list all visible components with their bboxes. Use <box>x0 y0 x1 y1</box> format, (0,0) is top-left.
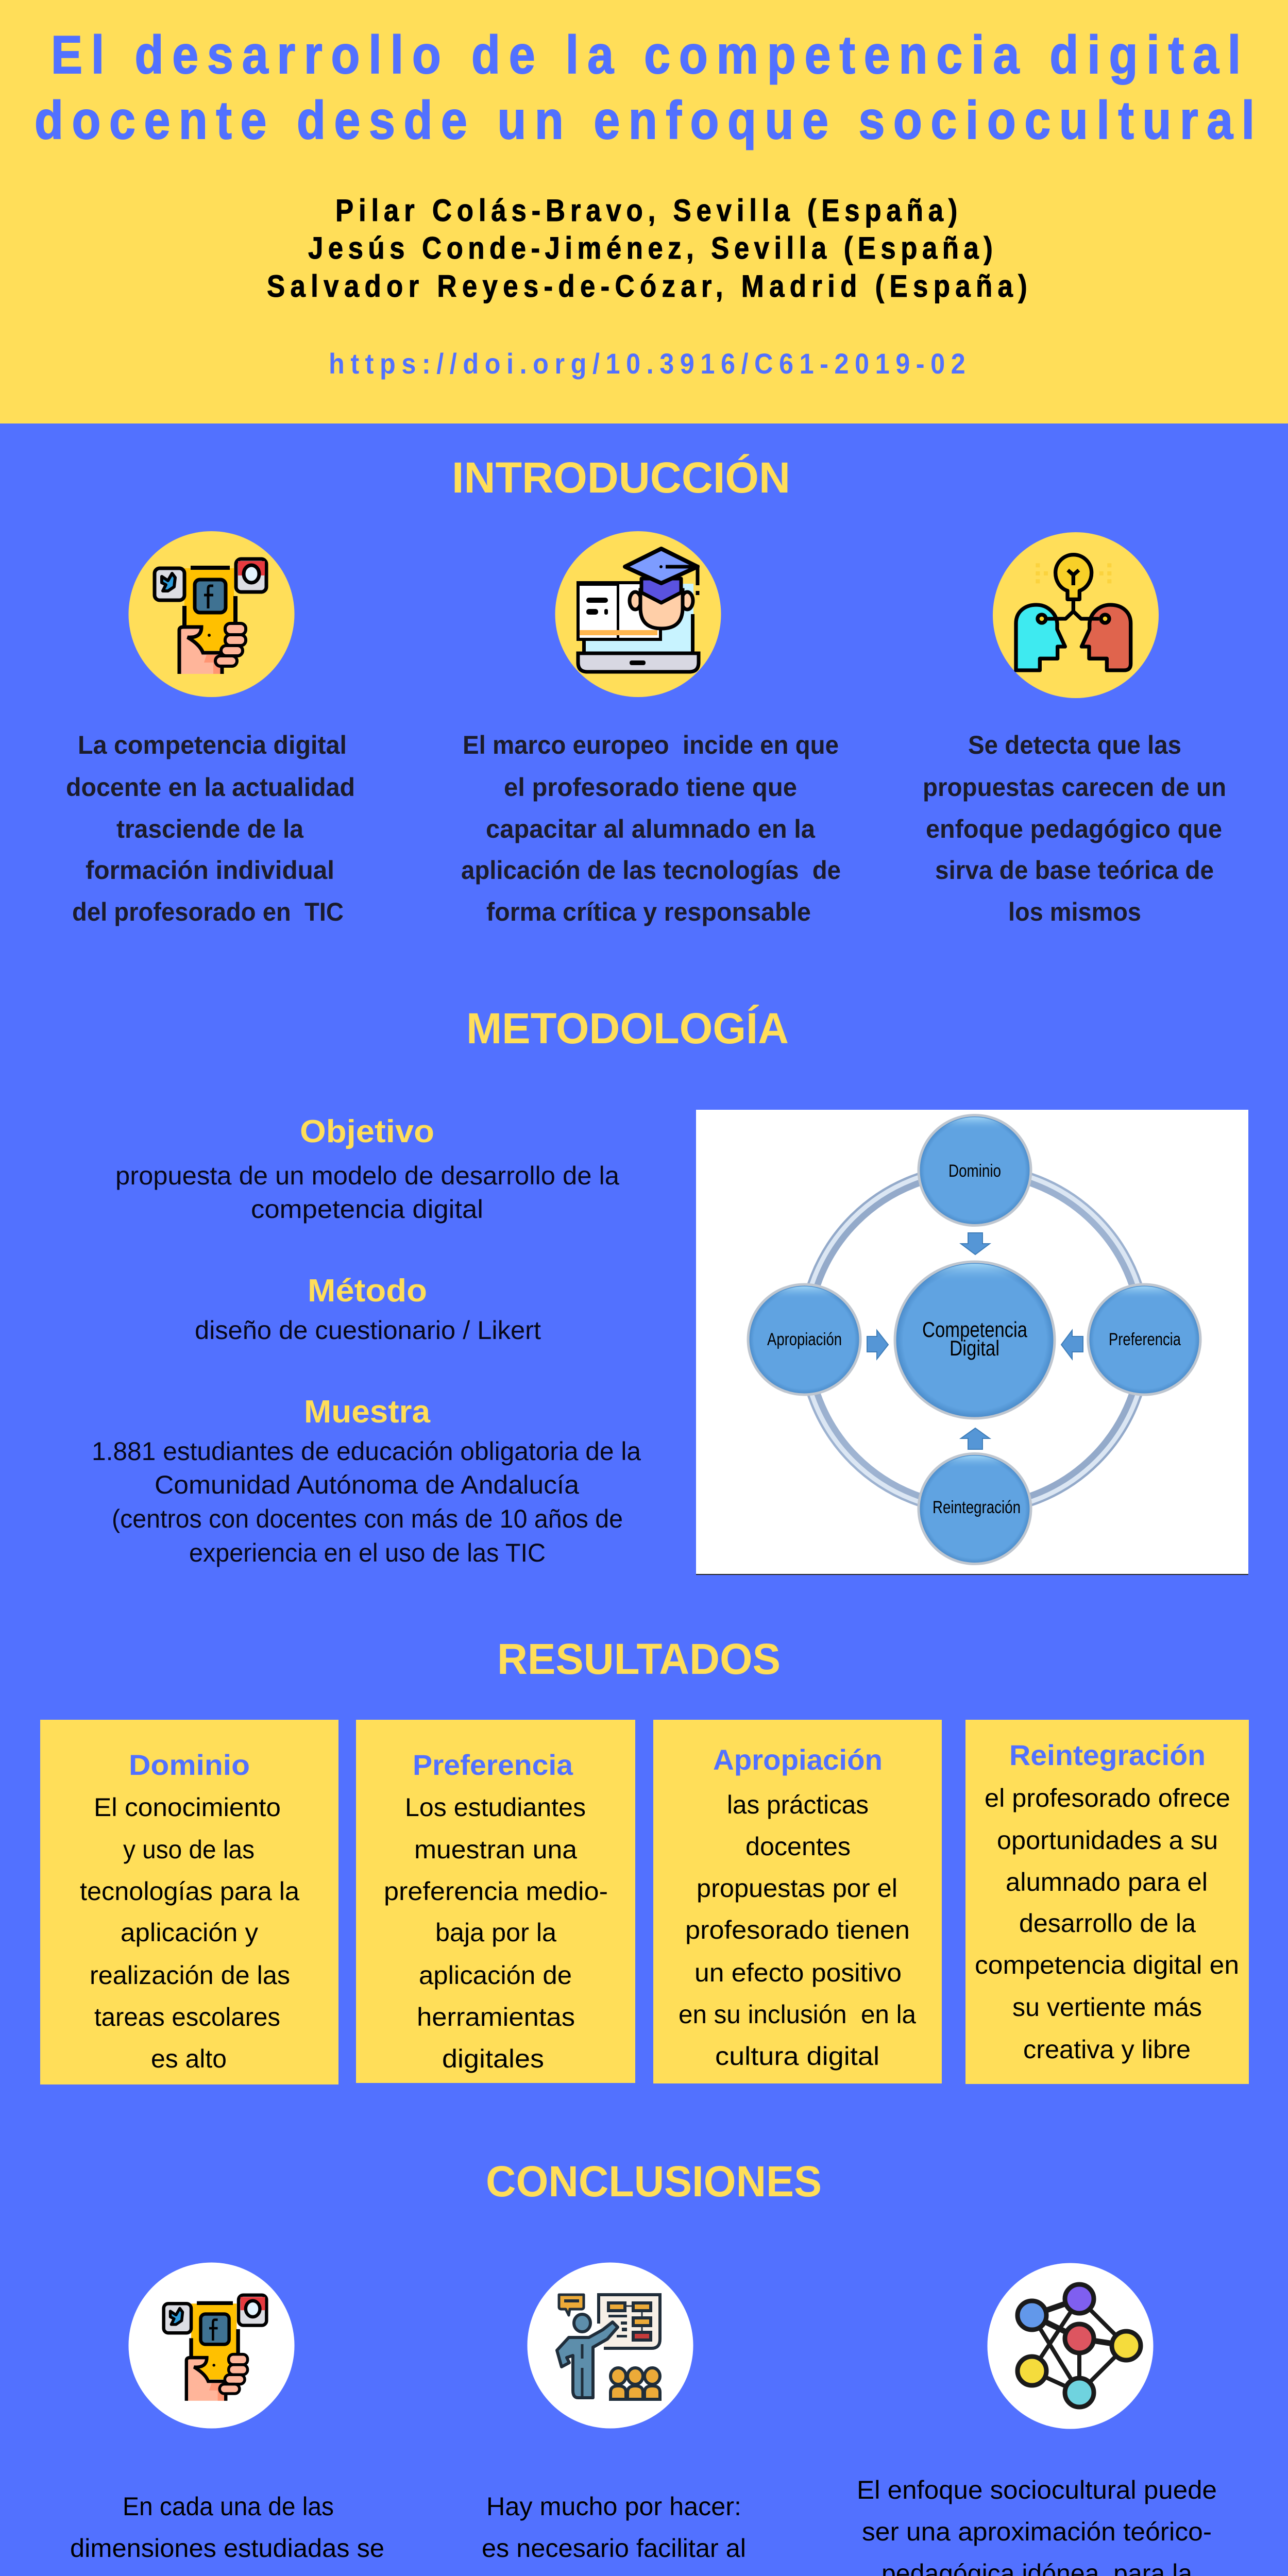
text: column 3: propuestas carecen de un <box>923 773 1226 802</box>
text block: método: diseño de cuestionario / Likert <box>195 1316 541 1345</box>
heading: conclusiones: CONCLUSIONES <box>486 2157 822 2206</box>
card: dominio: tareas escolares <box>94 2003 280 2031</box>
text: column 3 <box>923 731 1226 926</box>
card: dominio: El conocimiento <box>94 1793 281 1822</box>
card: preferencia: preferencia medio- <box>384 1877 608 1906</box>
panel: resultados <box>40 1635 1249 2084</box>
card: apropiación: propuestas por el <box>697 1874 897 1903</box>
diagram: modelo de competencia digital <box>696 1110 1248 1575</box>
text block: método <box>195 1273 541 1345</box>
node: reintegración <box>919 1454 1031 1564</box>
text: column 1: formación individual <box>86 856 334 885</box>
card: reintegración: desarrollo de la <box>1019 1909 1196 1938</box>
heading: resultados: RESULTADOS <box>497 1635 781 1683</box>
icon: phone with social apps on white circle <box>129 2263 295 2429</box>
text: column 1: La competencia digital <box>78 731 347 759</box>
node: preferencia: Preferencia <box>1109 1330 1181 1349</box>
text: column 1: dimensiones estudiadas se <box>70 2534 384 2563</box>
icon: two heads and a light bulb on yellow circle <box>993 532 1159 698</box>
doi link: https://doi.org/10.3916/C61-2019-02 <box>329 348 965 380</box>
text: column 2: capacitar al alumnado en la <box>486 815 816 843</box>
node: apropiación: Apropiación <box>767 1330 842 1349</box>
node: preferencia <box>1088 1284 1200 1395</box>
title <box>35 25 1255 150</box>
card: apropiación: las prácticas <box>727 1790 869 1819</box>
card: apropiación: un efecto positivo <box>694 1958 902 1987</box>
card: apropiación <box>653 1720 942 2083</box>
panel: metodología <box>92 1004 1248 1575</box>
card: apropiación: cultura digital <box>715 2042 879 2071</box>
text: column 1: del profesorado en TIC <box>72 897 344 926</box>
card: reintegración: creativa y libre <box>1023 2035 1191 2064</box>
card: preferencia: baja por la <box>435 1918 556 1947</box>
text: column 3: los mismos <box>1008 897 1141 926</box>
card: dominio: y uso de las <box>123 1835 255 1864</box>
card: reintegración: oportunidades a su <box>997 1826 1218 1855</box>
card: reintegración: Reintegración <box>1009 1739 1206 1771</box>
text: column 2: El marco europeo incide en que <box>463 731 839 759</box>
node: competencia digital <box>895 1262 1055 1418</box>
icon: network of coloured nodes on white circle <box>987 2263 1153 2429</box>
text block: objetivo <box>115 1114 619 1224</box>
text block: muestra: 1.881 estudiantes de educación obligatoria de la <box>92 1437 641 1466</box>
card: reintegración: su vertiente más <box>1012 1993 1202 2022</box>
text: column 2: forma crítica y responsable <box>486 897 811 926</box>
text: column 2 <box>461 731 841 926</box>
node: competencia digital: Digital <box>950 1336 999 1360</box>
text: column 3: sirva de base teórica de <box>935 856 1214 885</box>
text: column 3: Se detecta que las <box>968 731 1181 759</box>
panel: introducción <box>66 453 1226 926</box>
arrow: down <box>961 1233 990 1255</box>
title: docente desde un enfoque sociocultural <box>35 90 1255 150</box>
card: dominio: realización de las <box>90 1961 290 1990</box>
icon: phone with social apps on yellow circle <box>129 531 295 697</box>
authors <box>267 193 1027 303</box>
text block: muestra: Comunidad Autónoma de Andalucía <box>155 1470 579 1499</box>
arrow: up <box>961 1428 990 1449</box>
text block: muestra <box>92 1394 641 1567</box>
authors: Jesús Conde-Jiménez, Sevilla (España) <box>308 231 993 265</box>
text: column 1: En cada una de las <box>123 2492 334 2521</box>
text block: método: Método <box>308 1273 427 1309</box>
card: reintegración: competencia digital en <box>975 1951 1239 1979</box>
card: reintegración <box>965 1720 1249 2084</box>
text block: objetivo: propuesta de un modelo de desarrollo de la <box>115 1161 619 1190</box>
text: column 2 <box>432 2492 794 2576</box>
card: preferencia <box>356 1720 635 2083</box>
card: apropiación: docentes <box>745 1832 851 1861</box>
node: apropiación <box>748 1284 860 1395</box>
card: preferencia: digitales <box>442 2044 544 2073</box>
node: reintegración: Reintegración <box>933 1498 1021 1517</box>
icon: teacher presenting to audience on white circle <box>528 2263 693 2429</box>
node: dominio: Dominio <box>948 1161 1001 1181</box>
text: column 3: ser una aproximación teórico- <box>862 2517 1212 2546</box>
card: preferencia: aplicación de <box>419 1961 572 1990</box>
text: column 1: trasciende de la <box>116 815 304 843</box>
card: dominio <box>40 1720 338 2084</box>
card: preferencia: Preferencia <box>413 1749 573 1781</box>
heading: introducción: INTRODUCCIÓN <box>452 453 790 502</box>
card: dominio: Dominio <box>129 1749 250 1781</box>
text block: muestra: (centros con docentes con más de 10 años de <box>112 1504 623 1533</box>
arrow: right <box>867 1330 888 1359</box>
text: column 1 <box>70 2492 384 2576</box>
text: column 2: el profesorado tiene que <box>504 773 797 802</box>
card: preferencia: muestran una <box>414 1835 577 1864</box>
arrow: left <box>1061 1330 1083 1359</box>
text: column 2: es necesario facilitar al <box>482 2534 746 2563</box>
node: competencia digital: Competencia <box>922 1317 1028 1342</box>
card: dominio: aplicación y <box>121 1918 258 1947</box>
card: dominio: es alto <box>151 2044 227 2073</box>
title: El desarrollo de la competencia digital <box>51 25 1241 84</box>
card: reintegración: el profesorado ofrece <box>985 1784 1230 1812</box>
panel: header <box>0 0 1288 423</box>
authors: Pilar Colás-Bravo, Sevilla (España) <box>335 193 957 228</box>
panel: conclusiones <box>70 2157 1223 2576</box>
text block: objetivo: competencia digital <box>251 1195 483 1224</box>
text: column 1 <box>66 731 355 926</box>
text: column 3 <box>851 2476 1223 2576</box>
text block: objetivo: Objetivo <box>300 1114 434 1149</box>
card: apropiación: Apropiación <box>713 1743 883 1776</box>
authors: Salvador Reyes-de-Cózar, Madrid (España) <box>267 269 1027 303</box>
text: column 3: enfoque pedagógico que <box>926 815 1222 843</box>
card: preferencia: herramientas <box>417 2003 575 2031</box>
card: reintegración: alumnado para el <box>1006 1868 1208 1896</box>
heading: metodología: METODOLOGÍA <box>466 1004 789 1053</box>
text block: muestra: experiencia en el uso de las TIC <box>189 1538 546 1567</box>
text: column 2: aplicación de las tecnologías de <box>461 856 841 885</box>
card: dominio: tecnologías para la <box>80 1877 299 1906</box>
text: column 1: docente en la actualidad <box>66 773 355 802</box>
text: column 3: El enfoque sociocultural puede <box>857 2476 1217 2504</box>
card: preferencia: Los estudiantes <box>405 1793 586 1822</box>
text: column 2: Hay mucho por hacer: <box>486 2492 741 2521</box>
card: apropiación: profesorado tienen <box>685 1916 910 1944</box>
card: apropiación: en su inclusión en la <box>679 2000 916 2029</box>
node: dominio <box>919 1115 1031 1225</box>
text block: muestra: Muestra <box>304 1394 431 1430</box>
icon: graduate and laptop on yellow circle <box>555 531 721 697</box>
